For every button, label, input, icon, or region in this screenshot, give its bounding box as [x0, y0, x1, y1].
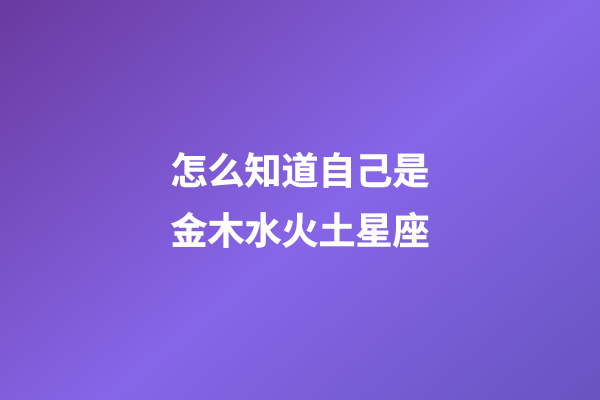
- title: 怎么知道自己是: [170, 151, 430, 192]
- title: [170, 151, 430, 252]
- title: 金木水火土星座: [170, 211, 430, 252]
